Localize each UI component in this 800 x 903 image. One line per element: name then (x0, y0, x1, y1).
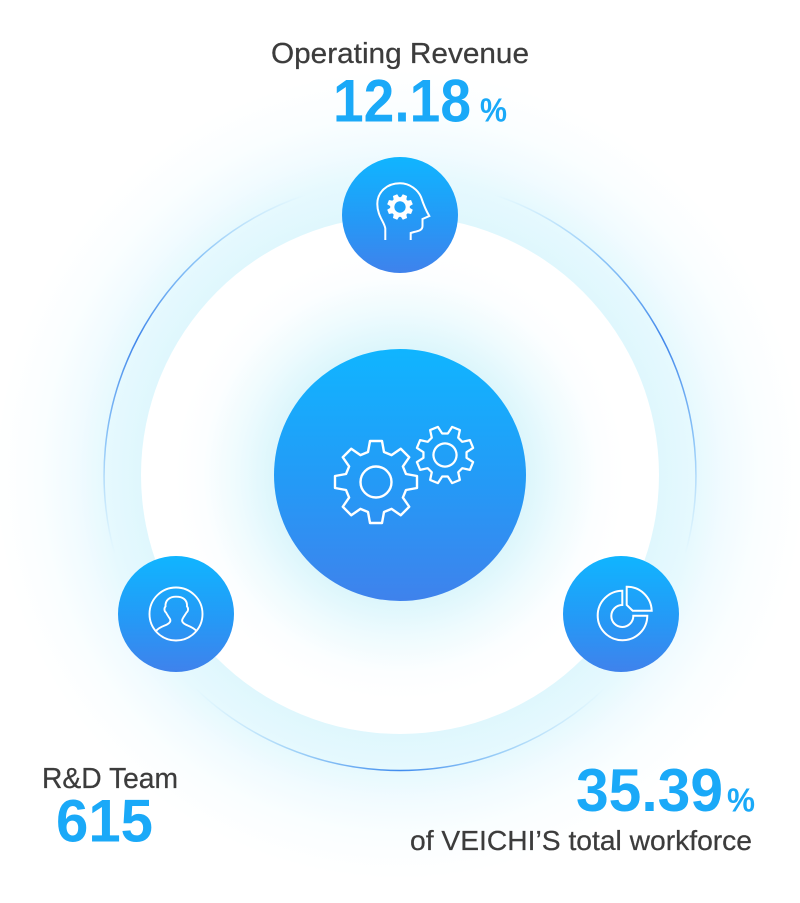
stat: operating revenue: Operating Revenue (271, 38, 529, 70)
stat: share of workforce: % (727, 782, 755, 818)
stat: operating revenue: 12.18 (333, 68, 471, 134)
outer ring (104, 195, 696, 770)
stat: share of workforce (410, 757, 755, 856)
icon: donut chart (598, 587, 652, 640)
left icon circle: person (118, 556, 234, 672)
top icon circle: head with gear (342, 157, 458, 273)
center circle with gears (274, 349, 526, 601)
stat: operating revenue: % (480, 92, 507, 128)
stat: R&amp;D team (42, 763, 178, 854)
right icon circle: pie chart (563, 556, 679, 672)
icon: gears (335, 418, 482, 523)
large gear (335, 441, 417, 523)
stat: operating revenue (271, 38, 529, 134)
icon: person in circle (150, 588, 202, 640)
icon: head outline (377, 183, 429, 240)
center glow (175, 250, 625, 700)
stat: R&amp;D team: 615 (56, 788, 153, 854)
stat: share of workforce: of VEICHI’S total workforce (410, 825, 752, 856)
stat: R&amp;D team: R&D Team (42, 763, 178, 795)
white inner disc with center glow (141, 216, 659, 734)
icon: small solid gear (384, 191, 416, 223)
small gear (408, 418, 482, 492)
stat: share of workforce: 35.39 (576, 757, 723, 824)
